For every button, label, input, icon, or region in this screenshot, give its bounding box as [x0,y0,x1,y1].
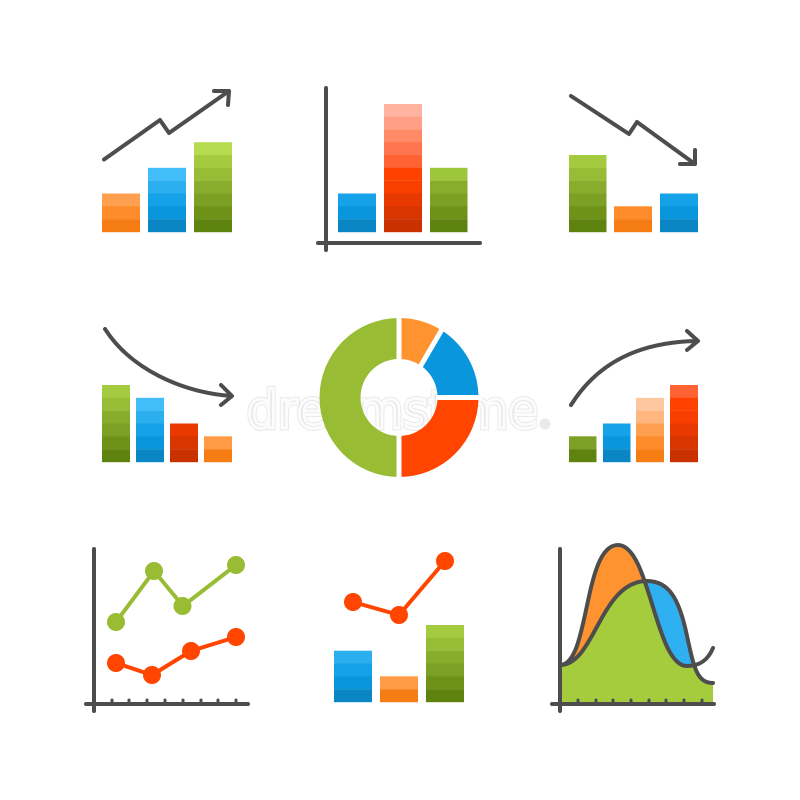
bar: red [170,424,198,462]
bar: orange [102,194,140,232]
bar: orange [204,436,232,462]
bar: blue [660,194,698,232]
watermark: dreamstime [247,381,538,441]
icon: bars with line overlay [334,552,464,702]
axes [552,549,714,711]
bar: blue [136,398,164,462]
icon: descending bars with curved arrow [102,329,232,462]
arrow: curve down [105,329,232,405]
icon: falling bars with zigzag arrow [569,96,698,232]
series: red [107,628,245,684]
area: green [562,583,713,702]
bar: blue [338,194,376,232]
curves [560,545,713,666]
bar: blue [148,168,186,232]
axis ticks [112,700,236,704]
bar: blue [603,424,630,462]
segment: red [399,398,478,477]
segment: green [320,318,399,477]
bar: blue [334,651,372,702]
icon: overlapping distribution curves [552,545,714,711]
bar: red [670,385,698,462]
icon: two-series line chart [86,549,248,711]
icon: axes with three bars [318,88,480,250]
area: blue [560,581,713,704]
bar: orange [380,676,418,702]
icon: rising bars with zigzag arrow [102,91,232,232]
bar: green [426,625,464,702]
bar: green [569,155,606,232]
axis ticks [578,700,702,704]
series: red line [344,552,454,624]
bar: orange [614,206,652,232]
arrow: curve up [571,331,698,405]
watermark: dreamstime [247,381,538,441]
series: green [107,556,245,631]
segment: orange [399,318,442,366]
axes [86,549,248,711]
bar: green [194,142,232,232]
donut chart [320,315,482,480]
bar: green [569,436,596,462]
axes [318,88,480,250]
area: orange [574,547,642,658]
bar: green [102,385,130,462]
segment: blue [421,330,479,398]
arrow: zigzag down [571,96,695,164]
bar: red [384,104,422,232]
bar: orange [636,398,664,462]
bar: green [430,168,468,232]
arrow: zigzag up [104,91,229,160]
icon: ascending bars with curved arrow [569,331,698,462]
